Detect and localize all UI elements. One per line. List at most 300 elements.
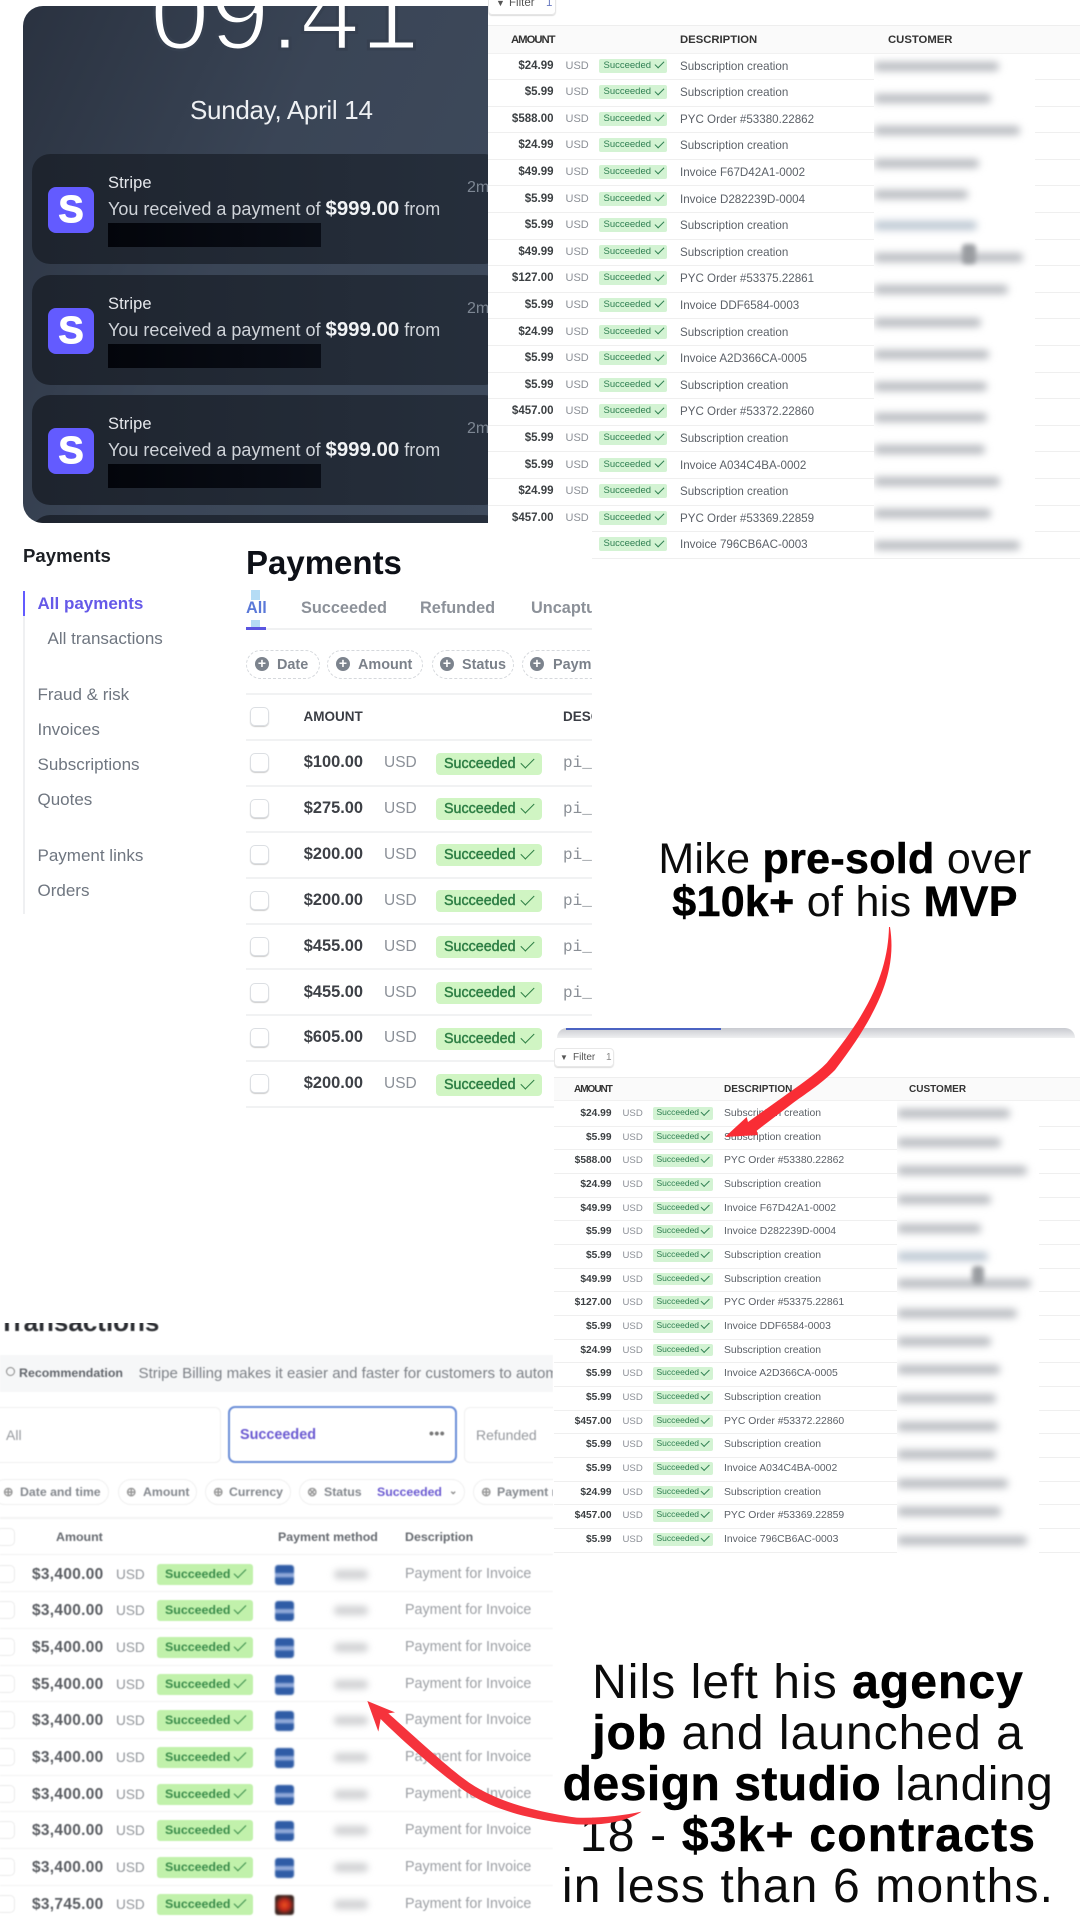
table rows: PYC Order #53375.22861 [724,1297,844,1308]
panel: top-right Stripe transaction table [488,0,1080,562]
table rows: $5.99 [525,379,554,391]
table rows: USD [566,219,589,231]
table rows: Succeeded [604,86,651,97]
table rows: PYC Order #53372.22860 [724,1416,844,1427]
notification 2: You received a payment of $999.00 from [108,318,440,340]
table rows: Succeeded [656,1509,699,1519]
sidebar navigation [23,545,163,914]
blurred customer column [897,1101,1039,1556]
table rows: $200.00 [304,891,363,909]
table rows: Succeeded [444,1077,516,1093]
table rows: Succeeded [604,60,651,70]
table rows: $5.99 [525,219,554,231]
table rows: Subscription creation [724,1439,821,1450]
table rows: USD [566,379,589,391]
table rows: Succeeded [656,1178,699,1188]
table rows: Succeeded [656,1486,699,1496]
table rows: Subscription creation [680,219,788,232]
table rows: Payment for Invoice [405,1712,531,1728]
table rows: PYC Order #53369.22859 [724,1510,844,1521]
table rows: Invoice A2D366CA-0005 [680,352,807,365]
table rows: $3,400.00 [32,1712,104,1729]
filter button [488,0,556,15]
table header: CUSTOMER [888,34,952,46]
table rows: Subscription creation [680,379,788,392]
table rows: Succeeded [444,893,516,909]
table rows: PYC Order #53369.22859 [680,512,814,525]
table rows: $127.00 [512,272,554,284]
panel: bottom-left Transactions table: ⊕ [481,1485,491,1499]
panel: Payments dashboard: + [339,655,347,671]
table rows: Subscription creation [724,1345,821,1356]
table rows: Succeeded [604,458,651,470]
panel: bottom-left Transactions table: Refunded [476,1427,537,1443]
table rows: USD [622,1321,643,1332]
table rows: USD [622,1203,643,1214]
table rows: Invoice D282239D-0004 [724,1226,836,1237]
table rows: Succeeded [604,299,651,310]
table rows: $49.99 [580,1203,612,1214]
table rows: Succeeded [165,1713,230,1727]
table rows: USD [384,938,417,955]
table rows: $127.00 [575,1297,612,1308]
sidebar navigation: Invoices [38,720,100,739]
table rows: Succeeded [656,1367,699,1377]
table rows: Payment for Invoice [405,1822,531,1838]
table rows: Succeeded [444,1031,516,1047]
table rows: Succeeded [444,939,516,955]
table rows: USD [116,1823,145,1838]
table rows: Succeeded [656,1438,699,1448]
table header [0,1519,553,1555]
notification 1: You received a payment of $999.00 from [108,198,440,220]
table header: AMOUNT [574,1084,612,1095]
table rows: $3,400.00 [32,1786,104,1803]
table rows: $588.00 [575,1155,612,1166]
table rows: Invoice D282239D-0004 [680,192,805,206]
table rows: Succeeded [604,379,651,390]
table rows: Succeeded [165,1567,230,1581]
table rows: $3,400.00 [32,1822,104,1839]
tabs: Refunded [420,599,495,617]
table header: Amount [56,1530,103,1544]
table rows: Succeeded [656,1415,699,1425]
table rows: Subscription creation [680,485,788,498]
table rows: $5.99 [525,352,554,364]
table rows: Invoice 796CB6AC-0003 [724,1534,838,1545]
table rows: $5.99 [586,1463,612,1474]
callout: Nils agency job: 18 - $3k+ contracts [580,1809,1036,1862]
callout: Nils agency job: Nils left his agency [592,1656,1024,1709]
table rows: Subscription creation [680,246,788,259]
table rows: $5.99 [525,458,554,470]
table rows: Succeeded [165,1897,230,1911]
table rows: USD [384,754,417,771]
table rows: Succeeded [656,1225,699,1235]
table rows: USD [566,113,589,125]
table rows: Invoice DDF6584-0003 [680,299,799,312]
table rows: Succeeded [656,1249,699,1259]
table rows: Invoice A034C4BA-0002 [724,1463,837,1474]
panel: Payments dashboard: + [443,655,451,671]
table rows: Succeeded [656,1107,699,1117]
table rows: Succeeded [165,1823,230,1837]
table rows: $24.99 [518,139,554,151]
table rows: Succeeded [604,512,651,523]
table rows: Succeeded [604,166,651,177]
sidebar navigation: All transactions [48,629,163,648]
sidebar navigation: Payment links [38,846,143,865]
notification 1: Stripe [108,174,152,192]
table rows: USD [566,246,589,258]
table rows: $24.99 [518,60,554,72]
table rows: Invoice A034C4BA-0002 [680,458,806,472]
table rows: USD [622,1439,643,1450]
table rows [488,59,1080,559]
table rows: USD [622,1274,643,1285]
table rows: $5,400.00 [32,1639,104,1656]
table rows: Succeeded [165,1603,230,1617]
table rows: Succeeded [444,756,516,772]
panel: Payments dashboard: + [533,655,541,671]
table rows: USD [622,1297,643,1308]
notification 4 (cropped) [32,515,502,625]
table rows: $275.00 [304,799,363,817]
table rows: USD [622,1179,643,1190]
table rows: USD [384,892,417,909]
table rows: $5.99 [586,1132,612,1143]
table rows: USD [116,1567,145,1582]
table rows: Subscription creation [680,86,788,99]
recommendation banner: Recommendation [19,1366,123,1380]
arrow: from Nils callout to bottom-left table [367,1701,642,1825]
icon: Stripe S: S [58,310,84,352]
table rows: Invoice F67D42A1-0002 [680,166,805,179]
panel: lower-right Stripe transaction table [554,1028,1080,1553]
table rows: $5.99 [586,1321,612,1332]
table rows: Succeeded [444,801,516,817]
filter pills [246,650,320,679]
table header: Payment method [278,1530,378,1544]
heading: Payments [246,544,402,581]
callout: Mike pre-sold: $10k+ of his MVP [672,878,1018,926]
callout: Nils agency job: design studio landing [563,1758,1053,1811]
table rows: Subscription creation [724,1487,821,1498]
table rows: Succeeded [604,246,651,257]
table rows: Succeeded [656,1202,699,1212]
table rows: Succeeded [444,985,516,1001]
table rows: Succeeded [604,272,651,283]
notification 3: You received a payment of $999.00 from [108,439,440,461]
table rows: Subscription creation [724,1108,821,1119]
top tab strip [557,1028,1075,1038]
panel: bottom-left Transactions table: Currency [229,1485,283,1499]
table header: AMOUNT [304,709,363,724]
table rows: Payment for Invoice [405,1859,531,1875]
table rows: USD [622,1416,643,1427]
table rows: PYC Order #53372.22860 [680,405,814,418]
table rows [0,1564,532,1916]
table rows: USD [622,1463,643,1474]
table rows: USD [566,299,589,311]
table rows: USD [116,1713,145,1728]
filter pills: ⊕ [3,1485,13,1499]
panel: Payments dashboard: Amount [358,657,412,673]
table rows: $3,400.00 [32,1566,104,1583]
callout: Nils agency job [562,1656,1054,1913]
table rows: USD [566,512,589,524]
table rows: $455.00 [304,937,363,955]
table rows: Payment for Invoice [405,1896,531,1912]
table rows: $200.00 [304,845,363,863]
callout: Mike pre-sold: Mike pre-sold over [658,835,1032,883]
table rows: Invoice 796CB6AC-0003 [680,538,808,551]
filter button: 1 [606,1052,612,1063]
panel: bottom-left Transactions table: Succeeded [377,1485,442,1499]
table rows: Subscription creation [680,432,788,445]
table header [488,25,1080,54]
table rows: Succeeded [656,1533,699,1543]
panel: bottom-left Transactions table: ⊕ [126,1485,136,1499]
date: Sunday, April 14 [190,95,373,125]
table rows: $49.99 [518,246,554,258]
table rows: Payment for Invoice [405,1639,531,1655]
table rows: $605.00 [304,1028,363,1046]
table rows: USD [622,1132,643,1143]
table rows: Subscription creation [680,139,788,152]
table header [246,695,592,741]
table rows: $5.99 [586,1226,612,1237]
table rows: Succeeded [165,1860,230,1874]
table rows: $100.00 [304,753,363,771]
icon: light bulb [6,1367,15,1376]
table rows: $24.99 [580,1487,612,1498]
table rows: Payment for Invoice [405,1602,531,1618]
table rows: $5.99 [586,1392,612,1403]
table rows: USD [116,1640,145,1655]
table rows: USD [566,432,589,444]
panel: Payments dashboard: Status [462,657,506,673]
filter pills: Date and time [20,1485,101,1499]
notification 3: Stripe [108,415,152,433]
table rows: USD [566,139,589,151]
table rows: $3,400.00 [32,1602,104,1619]
status tabs [0,1407,221,1463]
table header: Description [405,1530,473,1544]
callout: Nils agency job: in less than 6 months. [562,1860,1054,1913]
tabs: All [246,599,267,617]
table rows: Payment for Invoice [405,1566,531,1582]
recommendation banner [0,1355,553,1392]
sidebar navigation: Subscriptions [38,755,140,774]
table rows: Succeeded [604,538,651,549]
table rows: Succeeded [604,113,651,124]
tabs [246,590,592,630]
table rows: Subscription creation [680,60,788,72]
table rows: USD [566,192,589,204]
tabs: Succeeded [301,599,387,617]
table header: DESCRIPTION [724,1084,792,1095]
table rows: $455.00 [304,982,363,1000]
table rows: USD [566,166,589,178]
notification 2: Stripe [108,294,152,312]
table rows: Succeeded [604,219,651,230]
table rows: Succeeded [604,192,651,204]
table rows: Subscription creation [724,1392,821,1403]
notification 1 [32,154,502,264]
sidebar navigation: Orders [38,881,89,900]
arrow: from Mike callout to lower-right table [725,927,892,1137]
table rows: $49.99 [518,166,554,178]
table rows: $24.99 [580,1345,612,1356]
table rows: USD [622,1392,643,1403]
table rows: Succeeded [165,1787,230,1801]
table rows: USD [384,1075,417,1092]
panel: bottom-left Transactions table: Status [324,1485,362,1499]
table rows: $457.00 [512,512,554,524]
sidebar navigation: All payments [38,594,143,613]
table rows: Succeeded [165,1677,230,1691]
table rows: USD [384,846,417,863]
table rows: Succeeded [604,485,651,496]
table rows [246,753,592,1108]
table rows: USD [116,1750,145,1765]
panel: Payments dashboard [0,530,592,1110]
table rows: Payment for Invoice [405,1749,531,1765]
table rows: Succeeded [656,1462,699,1472]
filter button [554,1048,614,1067]
table rows: USD [622,1250,643,1261]
table rows: USD [622,1155,643,1166]
callout: Nils agency job: job and launched a [592,1707,1024,1760]
table rows: $5.99 [586,1439,612,1450]
table rows: USD [622,1487,643,1498]
table rows: USD [566,86,589,98]
table rows: Succeeded [604,139,651,150]
table rows: USD [116,1897,145,1912]
notification 2 [32,274,502,384]
table rows: Succeeded [444,847,516,863]
table rows: Subscription creation [724,1132,821,1143]
blurred customer column [874,54,1035,558]
table rows: USD [566,272,589,284]
table rows: USD [566,458,589,470]
table header: DESCRIPTION [680,34,757,46]
table rows: USD [116,1860,145,1875]
table rows: $3,400.00 [32,1859,104,1876]
filter pills: Date [277,657,308,673]
table rows: Succeeded [604,352,651,363]
table rows: Succeeded [165,1640,230,1654]
table rows: USD [384,1029,417,1046]
table header: AMOUNT [511,34,555,46]
table rows: $5.99 [525,86,554,98]
table rows: $3,745.00 [32,1896,104,1913]
panel: bottom-left Transactions table: Amount [143,1485,189,1499]
table rows: $5.99 [525,299,554,311]
table rows: $457.00 [575,1416,612,1427]
panel: bottom-left Transactions table: ⊗ [307,1485,317,1499]
icon: Stripe S [48,308,94,354]
table rows: Succeeded [604,405,651,416]
sidebar navigation: Payments [23,545,111,566]
table rows: Succeeded [656,1320,699,1330]
table rows: $3,400.00 [32,1749,104,1766]
table rows: $24.99 [518,485,554,497]
table rows: USD [566,352,589,364]
notification 3 [32,395,502,505]
table rows: Succeeded [656,1344,699,1354]
table rows: $5.99 [586,1368,612,1379]
table rows: PYC Order #53380.22862 [680,113,814,126]
table rows: USD [566,405,589,417]
table rows: USD [566,485,589,497]
callout: Mike pre-sold [658,835,1032,926]
table rows: PYC Order #53380.22862 [724,1155,844,1166]
table rows: Subscription creation [724,1250,821,1261]
table rows: $24.99 [580,1108,612,1119]
table rows: Invoice F67D42A1-0002 [724,1203,836,1214]
table rows: $49.99 [580,1274,612,1285]
table rows: USD [116,1787,145,1802]
table rows: Invoice A2D366CA-0005 [724,1368,838,1379]
table rows: Succeeded [656,1131,699,1141]
table rows: $5.99 [525,432,554,444]
table rows: Succeeded [656,1296,699,1306]
table rows: $24.99 [580,1179,612,1190]
table rows: Subscription creation [724,1179,821,1190]
filter button: ▼ [560,1053,568,1062]
table rows: $200.00 [304,1074,363,1092]
table rows: Succeeded [656,1391,699,1401]
icon: Stripe S [48,428,94,474]
table header: CUSTOMER [909,1084,966,1095]
filter pills [0,1479,109,1505]
table rows: USD [566,60,589,72]
table rows: Payment for Invoice [405,1786,531,1802]
table rows: USD [622,1510,643,1521]
filter pills: + [258,655,266,671]
panel: bottom-left Transactions table: ⌄ [449,1486,457,1497]
table rows: $5,400.00 [32,1676,104,1693]
table rows: $457.00 [512,405,554,417]
panel: bottom-left Transactions table: ••• [429,1425,445,1441]
table rows: Succeeded [656,1154,699,1164]
table rows: Payment for Invoice [405,1676,531,1692]
panel: bottom-left Transactions table: Succeeded [240,1427,316,1443]
table rows: PYC Order #53375.22861 [680,272,814,285]
filter button: Filter [573,1052,595,1063]
table rows: USD [622,1534,643,1545]
table rows: $5.99 [586,1250,612,1261]
table rows: USD [622,1368,643,1379]
table rows: Succeeded [604,326,651,336]
table rows: USD [566,326,589,338]
table rows: $5.99 [525,192,554,204]
table rows: Subscription creation [724,1274,821,1285]
table rows [554,1107,1080,1553]
table rows: Subscription creation [680,326,788,338]
status tabs: All [6,1427,22,1443]
icon: Stripe S: S [58,189,84,231]
table rows: Invoice DDF6584-0003 [724,1321,831,1332]
panel: bottom-left Transactions table: ⊕ [213,1485,223,1499]
table rows: Succeeded [604,432,651,443]
table rows: USD [384,800,417,817]
table rows: $24.99 [518,326,554,338]
sidebar navigation: Fraud & risk [38,685,129,704]
table rows: USD [116,1603,145,1618]
